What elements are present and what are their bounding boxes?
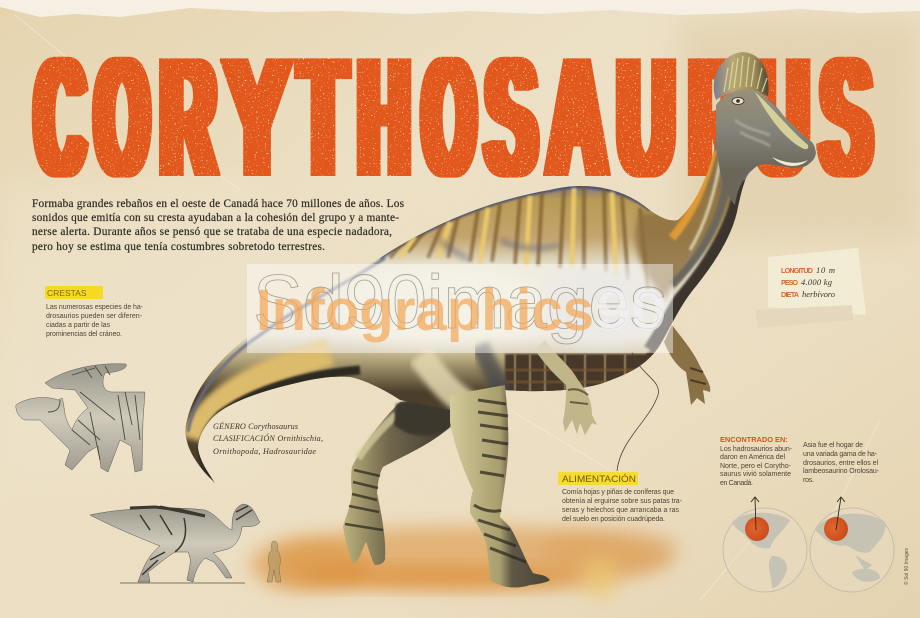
text: alimentación: obtenía al erguirse sobre sus patas tra-	[562, 498, 683, 505]
text: alimentación: Comía hojas y piñas de coníferas que	[562, 489, 674, 496]
intro paragraph: pero hoy se estima que tenía costumbres sobretodo terrestres.	[32, 241, 325, 253]
heading: crestas: CRESTAS	[47, 288, 87, 298]
title: Y	[225, 23, 289, 211]
text: encontrado en: saurus vivió solamente	[720, 471, 791, 478]
text: encontrado en	[720, 435, 794, 487]
text: asia: Asia fue el hogar de	[803, 442, 863, 449]
title: A	[548, 23, 606, 211]
intro paragraph: Formaba grandes rebaños en el oeste de Canadá hace 70 millones de años. Los	[32, 198, 404, 210]
far arm	[664, 325, 710, 405]
classification note: GÉNERO Corythosaurus	[213, 421, 298, 431]
text: crestas: Las numerosas especies de ha-	[46, 304, 144, 311]
data note: DIETA	[781, 290, 799, 299]
title: T	[300, 23, 346, 211]
classification note: Ornithopoda, Hadrosauridae	[213, 447, 316, 456]
sketch: corythosaurus side view	[90, 504, 260, 583]
globe: asia	[810, 497, 894, 592]
text: asia: ros.	[803, 477, 814, 484]
title: U	[618, 23, 674, 211]
heading: alimentación	[558, 472, 638, 485]
far hind leg	[343, 395, 460, 565]
data note	[755, 248, 866, 328]
title: U	[754, 23, 808, 211]
sand under the dinosaur	[250, 526, 680, 599]
text: encontrado en: daron en América del	[720, 454, 785, 461]
data note: LONGITUD	[781, 266, 813, 275]
heading: crestas	[45, 286, 103, 299]
watermark: Sd90images	[253, 260, 667, 345]
sketch: human scale figure	[267, 541, 281, 582]
title: O	[96, 23, 148, 211]
text: encontrado en: en Canadá.	[720, 480, 753, 487]
text: encontrado en: Los hadrosaurios abun-	[720, 446, 793, 453]
data note: PESO	[781, 278, 798, 287]
text: crestas: ciadas a partir de las	[46, 322, 110, 329]
text: asia: una variada gama de ha-	[803, 451, 878, 458]
text: asia: drosaurios, entre ellos el	[803, 460, 878, 467]
body, neck and tail	[186, 90, 816, 483]
dinosaur illustration	[186, 52, 816, 587]
text: encontrado en: ENCONTRADO EN:	[720, 435, 788, 444]
title: S	[486, 23, 536, 211]
title: C	[36, 23, 84, 211]
heading: alimentación: ALIMENTACIÓN	[562, 474, 636, 484]
intro paragraph: nerse alerta. Durante años se pensó que se trataba de una especie nadadora,	[32, 226, 392, 238]
near hind leg	[450, 385, 550, 587]
text: alimentación: seras y helechos que arrancaba a ras	[562, 507, 680, 514]
title: R	[690, 23, 742, 211]
data note: 10 m	[816, 265, 835, 275]
title: O	[424, 23, 474, 211]
callout line to feeding note	[617, 352, 658, 471]
head and crest	[714, 52, 815, 205]
front arm	[535, 340, 597, 435]
watermark: Infographics	[256, 278, 594, 343]
copyright: © Sol 90 Images	[903, 547, 910, 585]
watermark: 90	[595, 278, 667, 343]
text: asia: lambeosaurino Orolosau-	[803, 468, 880, 475]
title	[36, 23, 871, 211]
globe: north america	[723, 497, 807, 592]
text: crestas: drosaurios pueden ser diferen-	[46, 313, 143, 320]
classification note: CLASIFICACIÓN Ornithischia,	[213, 433, 323, 443]
sketch: two hadrosaur heads	[16, 364, 145, 472]
text: crestas: prominencias del cráneo.	[46, 331, 122, 338]
title: H	[359, 23, 409, 211]
data note: herbívoro	[802, 289, 835, 299]
intro paragraph: sonidos que emitía con su cresta ayudaban a la cohesión del grupo y a mante-	[32, 212, 399, 224]
text: alimentación: del suelo en posición cuadrúpeda.	[562, 516, 665, 523]
title: R	[161, 23, 215, 211]
text: encontrado en: Norte, pero el Corytho-	[720, 463, 792, 470]
data note: 4.000 kg	[801, 277, 832, 287]
